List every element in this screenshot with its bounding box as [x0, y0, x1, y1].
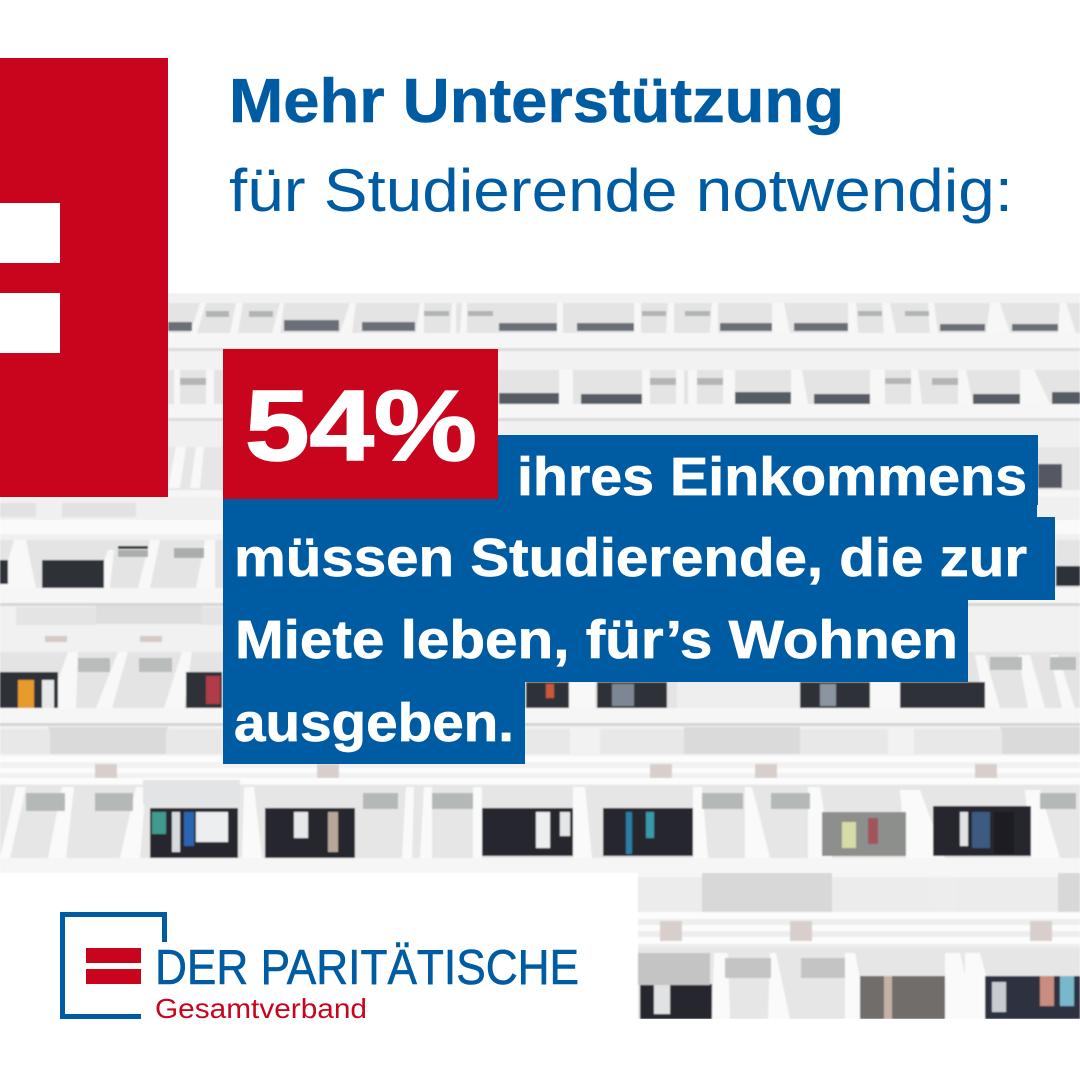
red brand block [0, 58, 168, 497]
row 1 [168, 293, 1080, 303]
statement text: müssen Studierende, die zur [234, 528, 1027, 588]
logo red bars [86, 948, 141, 984]
row 7 [638, 871, 1080, 877]
row 2 [168, 351, 1080, 370]
red percentage box [223, 349, 498, 499]
statement text: Miete leben, für’s Wohnen [235, 610, 958, 670]
statement text [234, 447, 1027, 753]
logo subline: Gesamtverband [155, 993, 367, 1024]
logo: Der Paritätische Gesamtverband [62, 914, 579, 1024]
statement text: ihres Einkommens [517, 447, 1027, 507]
blue text panel [223, 435, 1055, 764]
white equals bars [0, 203, 60, 353]
logo wordmark: DER PARITÄTISCHE [155, 941, 579, 995]
photo: apartment building facade [0, 293, 1080, 1019]
percentage figure: 54% [245, 370, 477, 482]
row 5 [0, 606, 1080, 652]
row 6 [0, 726, 1080, 785]
row 4 [0, 497, 1080, 540]
title: für Studierende notwendig: [229, 157, 1013, 224]
title [229, 67, 1013, 224]
logo frame [62, 914, 164, 1016]
row 3 [168, 421, 1080, 447]
title: Mehr Unterstützung [229, 67, 844, 136]
statement text: ausgeben. [234, 693, 514, 753]
